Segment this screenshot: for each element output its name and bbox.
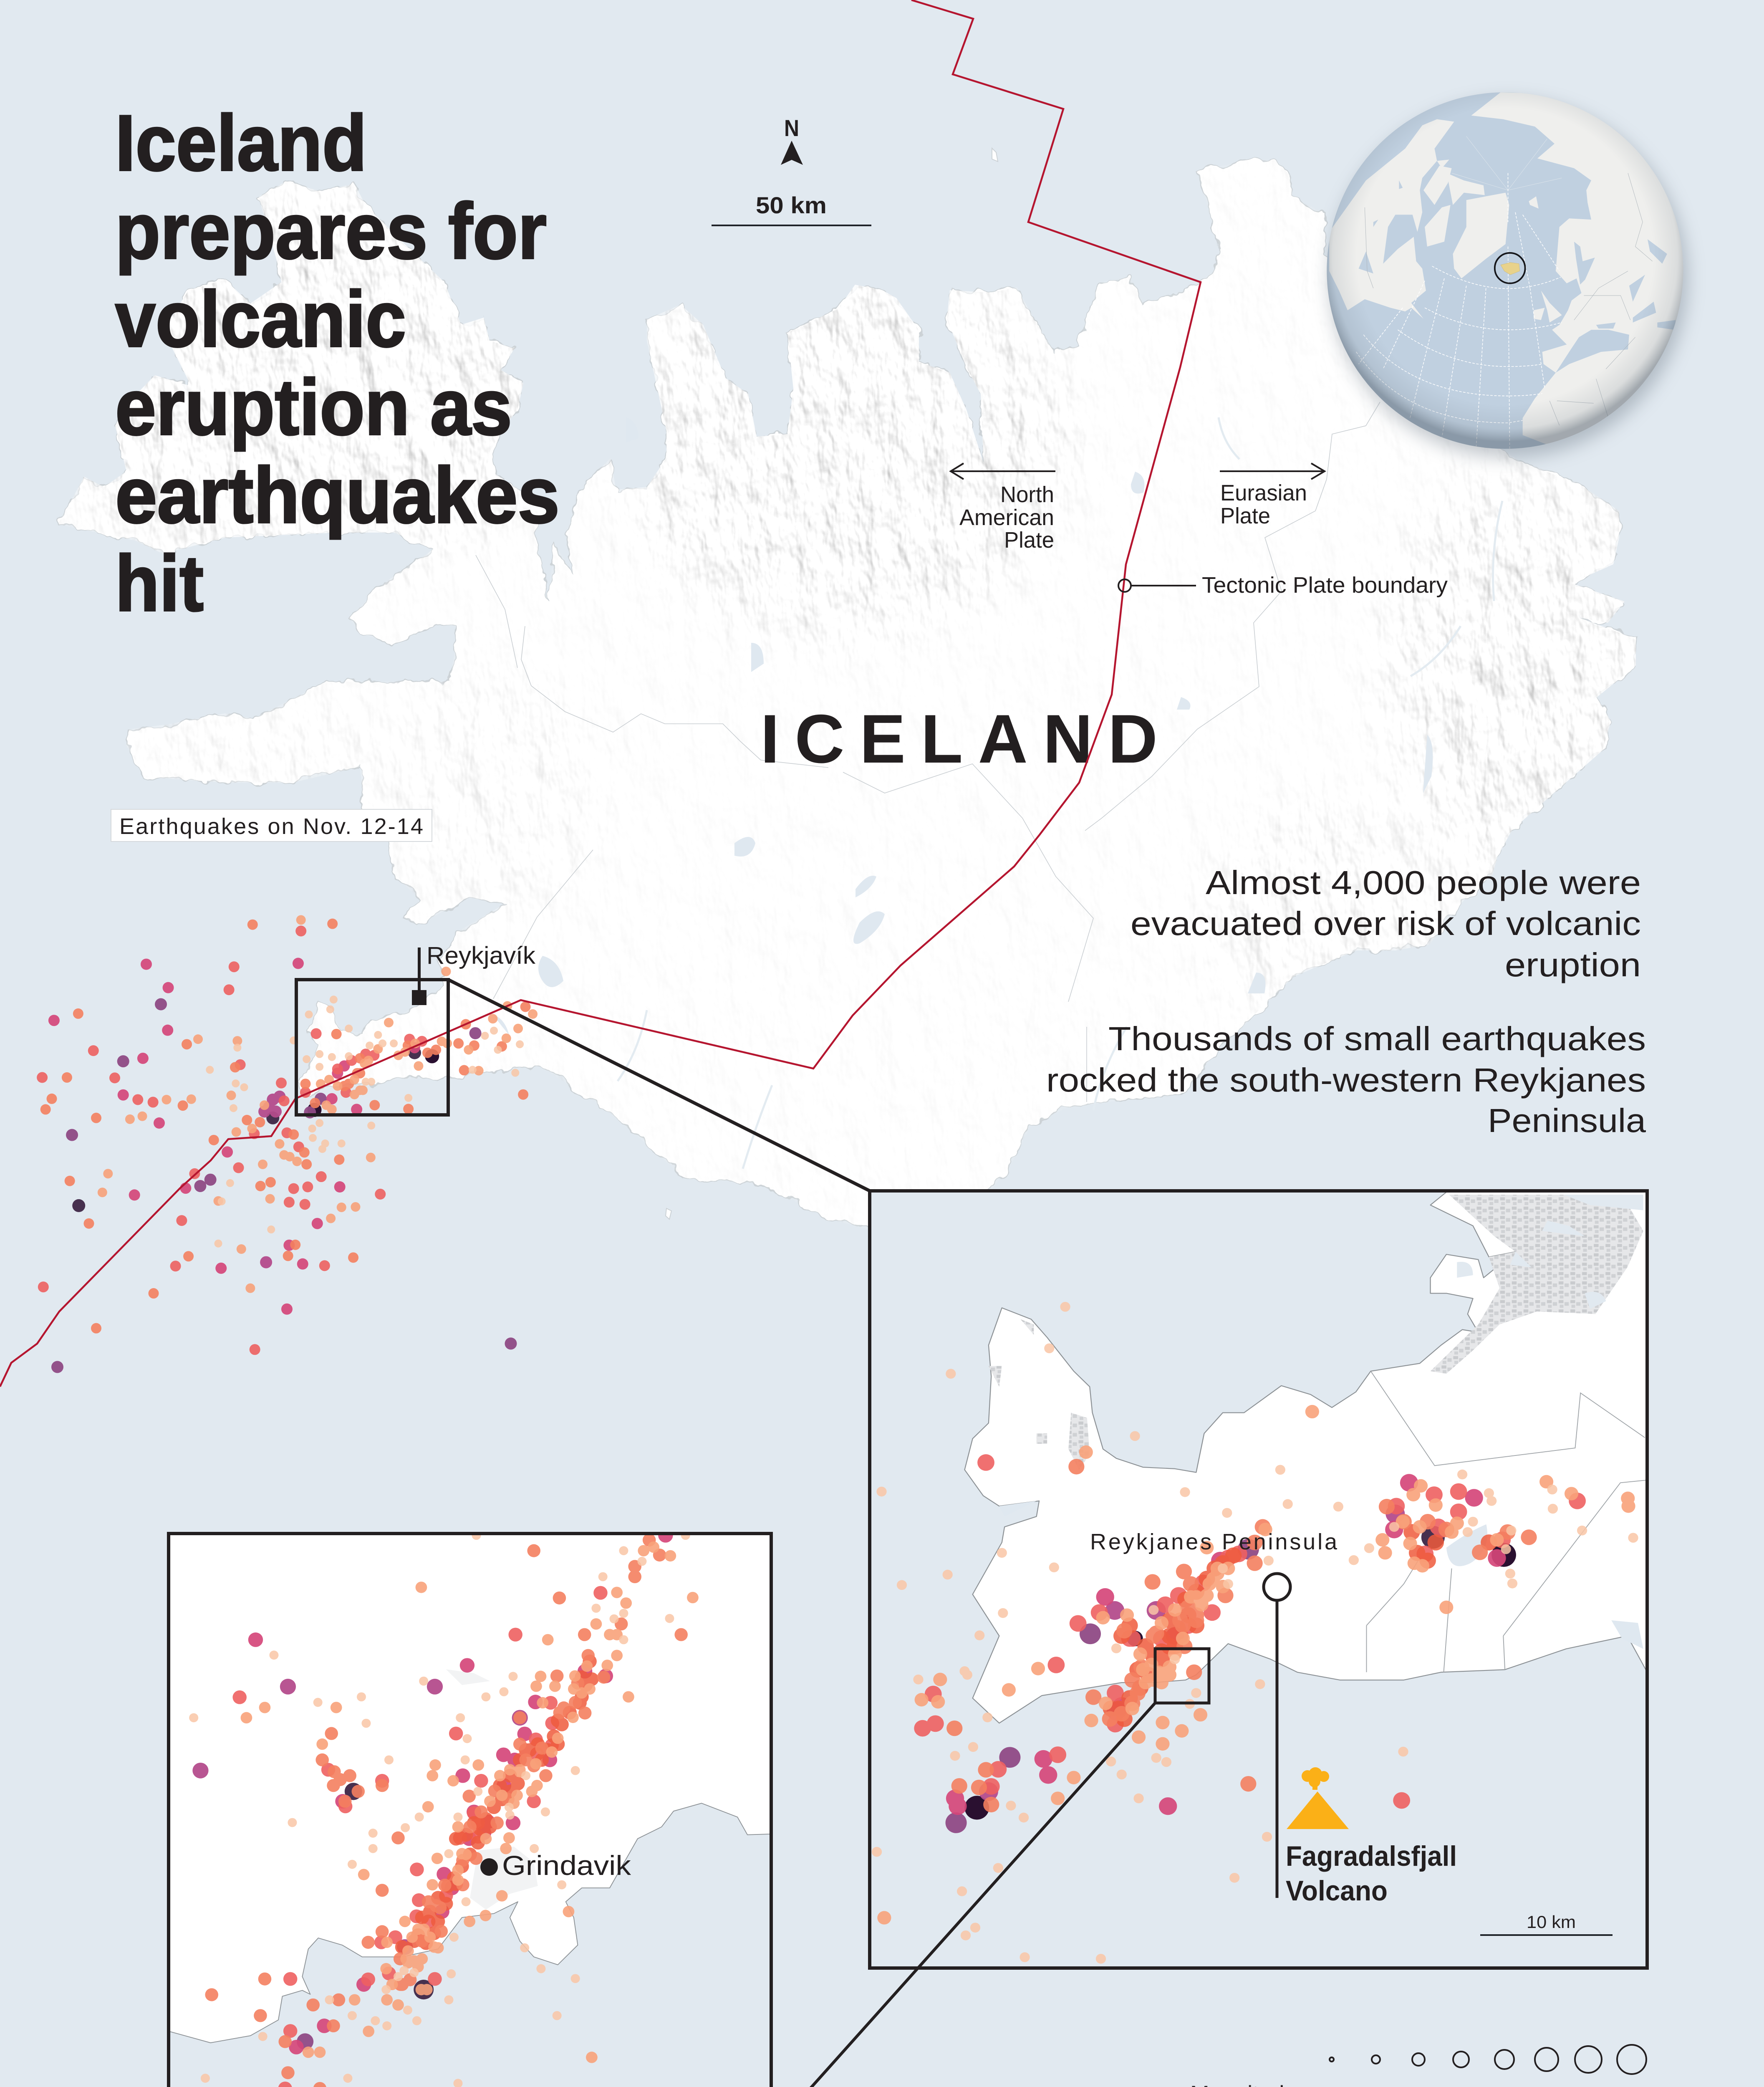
- label: North American Plate with arrow: North: [1000, 482, 1054, 507]
- label: Grindavik marker: Grindavik: [502, 1850, 631, 1881]
- text block: evacuation: Almost 4,000 people were: [1206, 864, 1641, 901]
- title: prepares for: [115, 187, 547, 275]
- title: Iceland: [115, 99, 367, 187]
- north arrow: [781, 115, 803, 165]
- text block: earthquakes: Thousands of small earthquakes: [1108, 1020, 1646, 1057]
- label: Reykjavik marker: Reykjavík: [426, 942, 536, 969]
- map: Iceland land mass: [42, 146, 1669, 1231]
- label: Eurasian Plate with arrow: [1220, 463, 1325, 528]
- panel: Reykjanes Peninsula inset: [870, 1191, 1648, 1968]
- label: Fagradalsfjall Volcano: Fagradalsfjall: [1286, 1840, 1457, 1872]
- title: [115, 99, 560, 628]
- legend: magnitude: [1190, 2045, 1646, 2087]
- main map earthquakes: [42, 920, 533, 1367]
- connector line to Reykjanes inset: [448, 980, 870, 1191]
- text block: earthquakes: rocked the south-western Reykjanes: [1046, 1061, 1646, 1099]
- tectonic plate boundary line: [0, 0, 1201, 1387]
- panel: Grindavik inset: [167, 1534, 773, 2087]
- scale bar: 50 km: 50 km: [756, 192, 827, 218]
- locator box: Grindavik on Reykjanes inset: [1155, 1649, 1209, 1703]
- label: Fagradalsfjall Volcano: Volcano: [1286, 1875, 1388, 1907]
- label: Reykjanes Peninsula: Reykjanes Peninsula: [1090, 1529, 1338, 1554]
- marker: Fagradalsfjall volcano pin: [1264, 1574, 1290, 1898]
- title: hit: [115, 539, 204, 628]
- connector line to Grindavik inset: [771, 1703, 1155, 2087]
- label: Tectonic Plate boundary callout: Tectonic Plate boundary: [1202, 573, 1448, 598]
- inset earthquakes: Grindavik: [194, 1535, 693, 2087]
- text block: evacuation: evacuated over risk of volcanic: [1131, 905, 1641, 942]
- north arrow: N: [784, 115, 799, 141]
- label: North American Plate with arrow: [951, 463, 1055, 553]
- label: Eurasian Plate with arrow: Plate: [1220, 503, 1270, 528]
- scale bar: 10 km: 10 km: [1527, 1912, 1576, 1932]
- text block: earthquakes: Peninsula: [1488, 1102, 1646, 1139]
- country label: ICELAND: ICELAND: [760, 700, 1158, 777]
- locator box: Reykjanes on main map: [296, 980, 448, 1115]
- label: North American Plate with arrow: American: [959, 505, 1054, 530]
- label: Reykjavik marker: [412, 942, 536, 1005]
- icon: volcano: [1287, 1767, 1349, 1829]
- scale bar: 10 km: [1480, 1912, 1613, 1936]
- locator globe: [1327, 92, 1687, 457]
- label: North American Plate with arrow: Plate: [1004, 528, 1054, 553]
- text block: earthquakes: [1046, 1020, 1646, 1139]
- title: earthquakes: [115, 451, 560, 540]
- text block: evacuation: [1131, 864, 1641, 983]
- label: earthquake date box: Earthquakes on Nov. 12-14: [119, 814, 423, 839]
- scale bar: 50 km: [712, 192, 871, 226]
- label: Fagradalsfjall Volcano: [1286, 1840, 1457, 1907]
- inset earthquakes: Reykjanes: [877, 1307, 1633, 1959]
- text block: evacuation: eruption: [1505, 946, 1641, 983]
- title: volcanic: [115, 275, 406, 364]
- label: Eurasian Plate with arrow: Eurasian: [1220, 480, 1307, 505]
- title: eruption as: [115, 363, 512, 452]
